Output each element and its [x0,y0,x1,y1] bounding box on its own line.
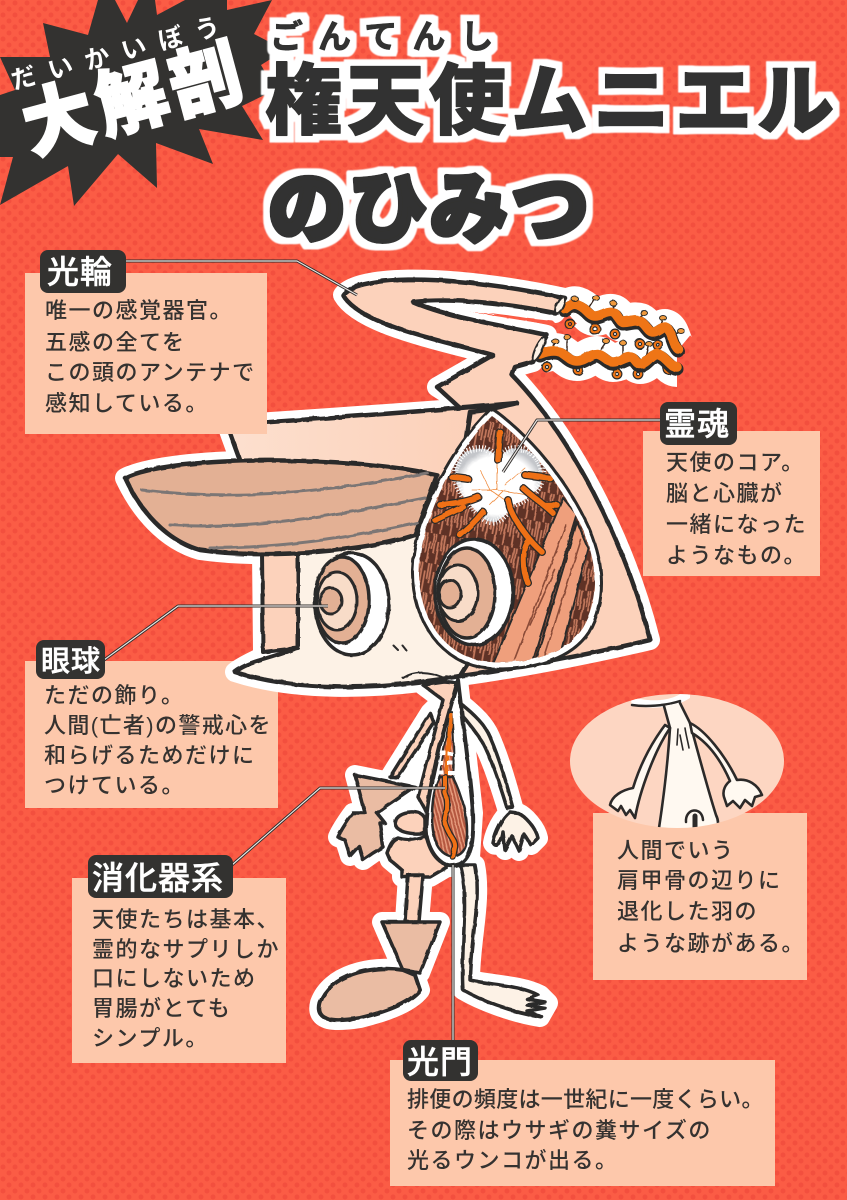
eyeball text: つけている。 [44,773,185,798]
leader lines [104,261,660,1040]
slit between antenna arms [470,312,558,326]
right leg and foot [460,865,545,1017]
badge ruby: だいかいぼう [8,9,236,95]
head and antenna [343,280,650,676]
stomach sac [432,777,467,856]
eyeball text: 和らげるためだけに [44,743,256,768]
soul text: 天使のコア。 [666,450,805,475]
title [265,18,839,253]
intestine [444,777,455,857]
right hand on hip [395,812,425,834]
vent label: 光門 [407,1044,473,1080]
panel: eyeball background [25,661,278,808]
vent text: 光るウンコが出る。 [407,1148,619,1173]
eyeball text [44,683,272,798]
eyeball text: 人間(亡者)の警戒心を [44,713,272,738]
soul text: 一緒になった [666,512,807,537]
back view figure [610,694,762,830]
eyeball text: ただの飾り。 [44,683,185,708]
hat band [227,403,517,540]
back view left arm [610,725,670,818]
back view text: ような跡がある。 [617,931,805,956]
digestive text: 天使たちは基本、 [92,907,280,932]
digestive text: 霊的なサプリしか [92,937,280,962]
panel: back view [570,694,807,980]
esophagus [439,712,454,777]
nose and mouth [394,645,442,678]
knob stems [552,299,680,362]
soul label: 霊魂 [664,406,730,442]
character: Munieru anatomy [125,280,684,1020]
back view text: 肩甲骨の辺りに [617,868,782,893]
digestive text: 口にしないため [92,966,257,991]
panel: soul [643,402,820,576]
filament knobs [552,296,684,346]
halo text: 感知している。 [45,391,209,416]
halo label: 光輪 [47,254,113,290]
back view text: 人間でいう [617,838,735,863]
title line 1: 権天使ムニエル [265,59,839,145]
antenna tube ends [553,295,567,315]
soul text [666,450,807,568]
hip [387,836,447,877]
badge heading: 大解剖 [14,31,256,169]
eyeball label: 眼球 [41,645,101,678]
left leg, boot and foot [405,875,423,922]
back view right arm [690,723,762,808]
halo text: この頭のアンテナで [45,360,256,385]
panel: digestive [72,855,286,1063]
digestive text [92,907,280,1051]
title ruby: ごんてんし [270,18,508,55]
sleeve and left hand [338,775,415,860]
panel: halo [25,250,267,434]
starburst badge [0,0,285,206]
eyeball label and text [36,640,272,798]
digestive system [426,680,473,866]
left arm [390,713,434,777]
halo text: 五感の全てを [45,330,186,355]
loops on filaments [544,321,671,377]
soul text: 脳と心臓が [666,481,784,506]
left eyeball [315,553,389,655]
face [235,530,470,687]
character white outline [125,280,678,1020]
right eyeball [435,539,513,645]
panel: vent [390,1040,775,1186]
back view oval [570,694,784,828]
soul vessels [435,432,557,583]
halo text: 唯一の感覚器官。 [45,298,233,323]
back view text: 退化した羽の [617,899,758,924]
back view text [617,838,805,956]
right arm and hand [460,703,513,808]
halo text [45,298,256,416]
soul [455,448,542,522]
soul text: ようなもの。 [666,543,807,568]
neck strip [262,552,298,652]
back view panel [593,813,807,980]
vent text: その際はウサギの糞サイズの [407,1118,712,1143]
vent text: 排便の頻度は一世紀に一度くらい。 [407,1087,765,1112]
teardrop cutaway [410,410,605,670]
back view wing marks [677,728,689,750]
digestive label: 消化器系 [92,860,224,896]
hat disc [125,460,437,554]
muscle bands [493,498,577,664]
title line 2: のひみつ [268,165,592,253]
halo label [40,250,126,293]
vent text [407,1087,765,1173]
digestive text: 胃腸がとても [92,996,231,1021]
antenna filaments [540,304,678,369]
digestive text: シンプル。 [92,1026,209,1051]
torso strip [418,682,457,813]
